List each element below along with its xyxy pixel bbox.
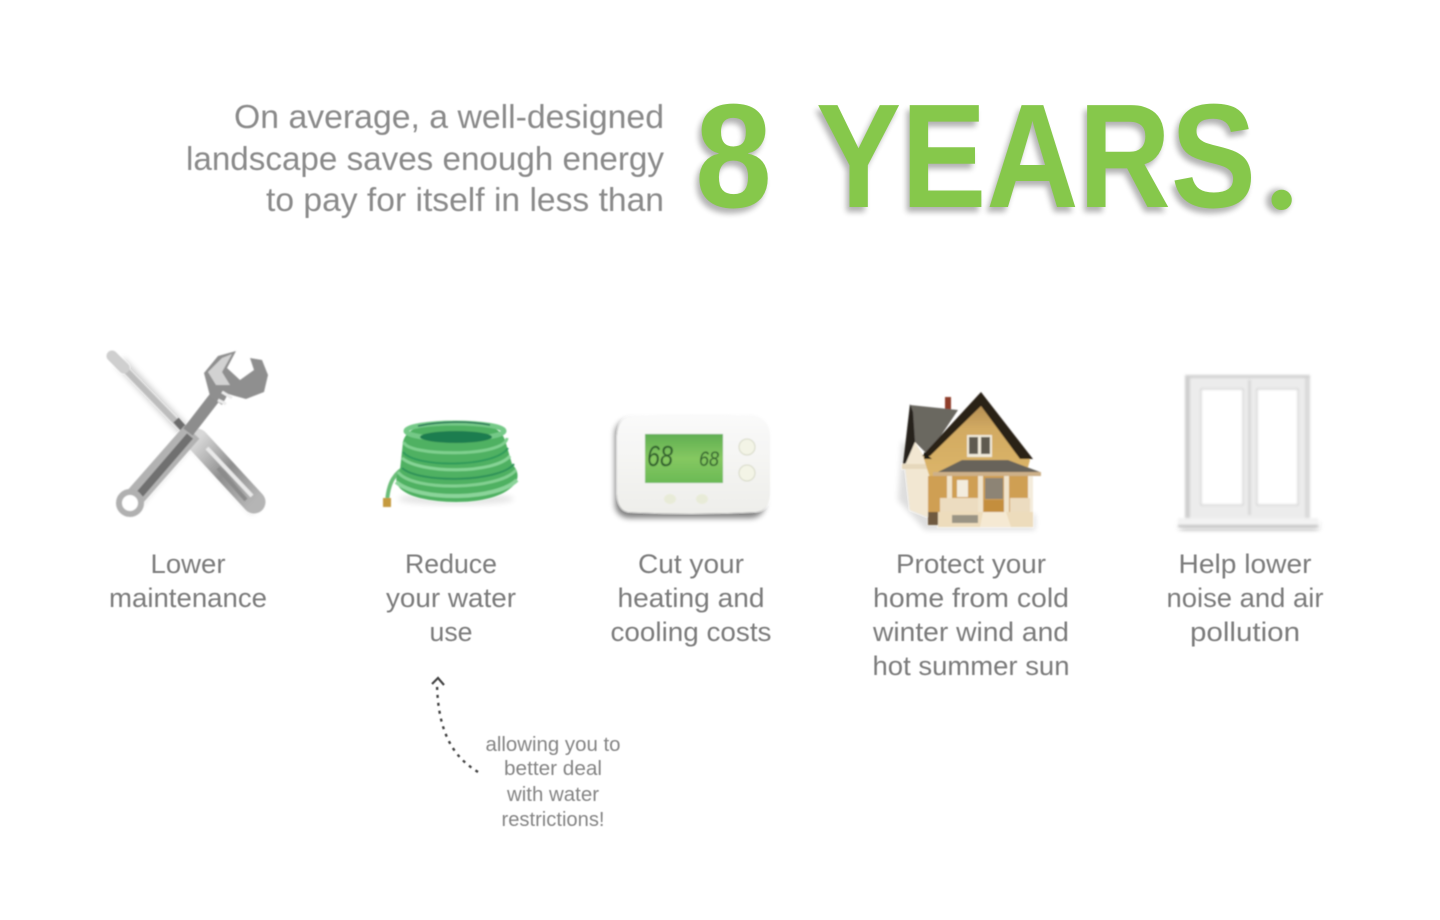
intro sentence: landscape saves enough energy: [186, 140, 664, 177]
headline: 8 years: .: [1266, 98, 1297, 236]
icon: coiled green hose: [383, 422, 518, 507]
intro sentence: to pay for itself in less than: [266, 181, 664, 218]
label: cut heating and cooling costs: cooling costs: [610, 617, 772, 647]
label: help lower noise and air pollution: [1166, 549, 1324, 647]
intro sentence: [186, 98, 664, 218]
arrow: dotted curve to water label: [432, 678, 478, 772]
label: protect your home: [872, 549, 1070, 681]
headline: 8 years: YEARS: [813, 79, 1253, 244]
label: lower maintenance: Lower: [150, 549, 226, 579]
label: help lower noise and air pollution: Help lower: [1178, 549, 1312, 579]
label: protect your home: hot summer sun: [872, 651, 1070, 681]
note: water restrictions: better deal: [504, 758, 602, 780]
thermostat display readings: [647, 441, 719, 473]
label: protect your home: Protect your: [896, 549, 1046, 579]
headline: 8 years: YEARS: [816, 74, 1256, 239]
label: lower maintenance: [109, 549, 267, 613]
note: water restrictions: restrictions!: [502, 809, 604, 831]
label: lower maintenance: maintenance: [109, 583, 267, 613]
label: protect your home: home from cold: [873, 583, 1069, 613]
icon: house: [898, 392, 1041, 530]
icon: crossed wrench and screwdriver: [112, 351, 268, 514]
label: cut heating and cooling costs: heating and: [618, 583, 764, 613]
note: water restrictions: with water: [506, 784, 599, 806]
label: cut heating and cooling costs: [610, 549, 772, 647]
label: help lower noise and air pollution: pollution: [1190, 617, 1300, 647]
label: reduce your water use: [386, 549, 516, 647]
icon: thermostat: [615, 414, 770, 518]
note: water restrictions: [486, 734, 620, 831]
thermostat display readings: 68: [647, 441, 673, 473]
label: reduce your water use: Reduce: [405, 549, 497, 579]
label: cut heating and cooling costs: Cut your: [638, 549, 744, 579]
note: water restrictions: allowing you to: [486, 734, 620, 756]
headline: 8 years: 8: [692, 79, 769, 244]
label: reduce your water use: use: [430, 617, 472, 647]
headline: 8 years: 8: [695, 74, 772, 239]
intro sentence: On average, a well-designed: [234, 98, 664, 135]
label: reduce your water use: your water: [386, 583, 516, 613]
icon: window: [1178, 375, 1318, 530]
label: protect your home: winter wind and: [872, 617, 1069, 647]
thermostat display readings: 68: [699, 448, 719, 471]
label: help lower noise and air pollution: noise and air: [1166, 583, 1324, 613]
